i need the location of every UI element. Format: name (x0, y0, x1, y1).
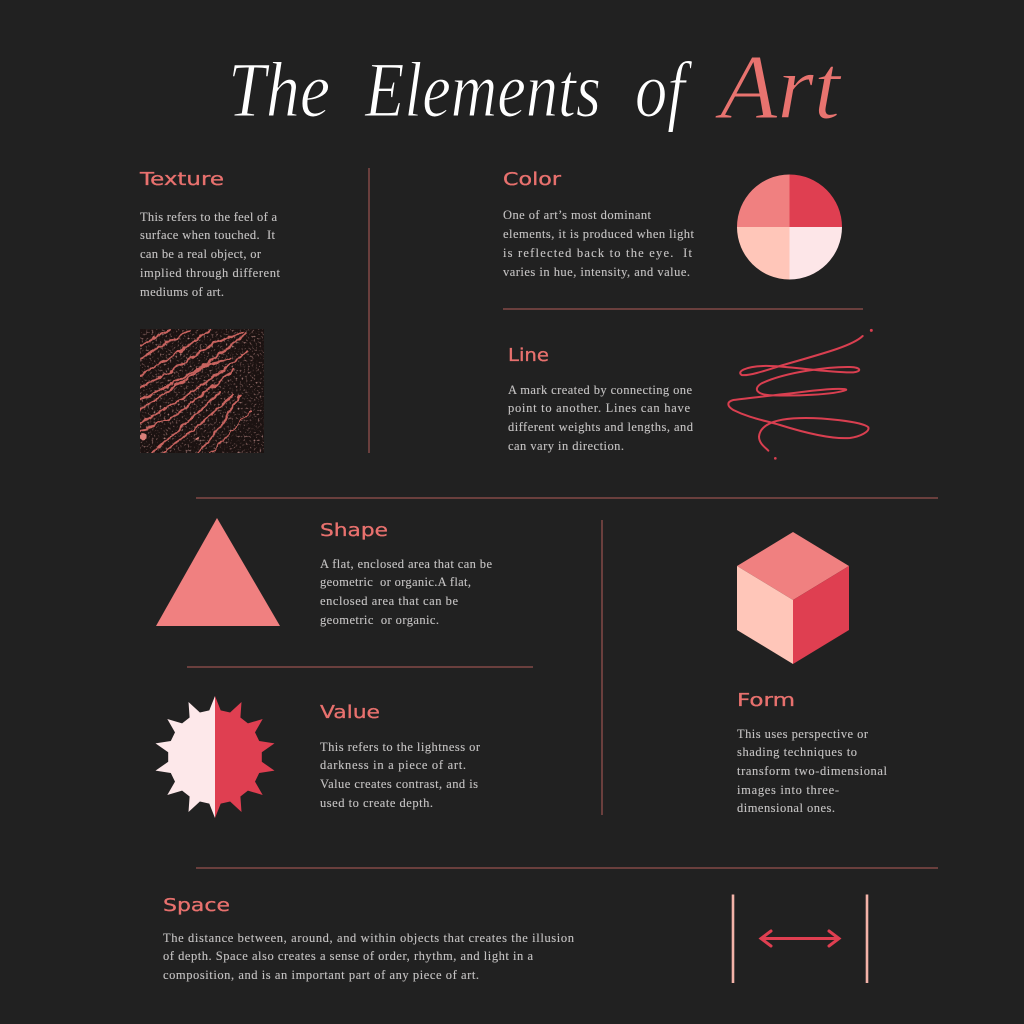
text block: line description: different weights and lengths, and (508, 420, 694, 434)
panel: texture (139, 170, 281, 453)
heading: value: Value (320, 703, 380, 723)
text block: shape description: geometric or organic.A flat, (320, 575, 471, 589)
text block: form description: dimensional ones. (737, 801, 835, 815)
title: The (228, 46, 330, 133)
title: Elements (364, 46, 601, 133)
text block: texture description: This refers to the feel of a (140, 210, 277, 224)
text block: value description: used to create depth. (320, 796, 433, 810)
heading: line: Line (508, 346, 549, 366)
panel: line (508, 329, 873, 460)
text block: color description: varies in hue, intensity, and value. (503, 265, 690, 279)
text block: shape description: geometric or organic. (320, 613, 439, 627)
text block: line description: point to another. Lines can have (508, 401, 690, 415)
text block: texture description: mediums of art. (140, 285, 224, 299)
text block: space description: of depth. Space also creates a sense of order, rhythm, and light in a (163, 949, 533, 963)
icon: squiggle line (728, 329, 873, 460)
text block: texture description (140, 210, 281, 299)
text block: color description (503, 208, 695, 279)
text block: color description: elements, it is produced when light (503, 227, 695, 241)
text block: form description: images into three- (737, 783, 839, 797)
text block: value description: Value creates contrast, and is (320, 777, 478, 791)
text block: line description (508, 383, 694, 453)
text block: line description: A mark created by connecting one (508, 383, 692, 397)
icon: triangle (156, 518, 280, 626)
text block: value description: darkness in a piece of art. (320, 758, 466, 772)
heading: form: Form (737, 691, 795, 711)
text block: line description: can vary in direction. (508, 439, 624, 453)
text block: space description: The distance between, around, and within objects that creates the illusion (163, 931, 575, 945)
text block: shape description (320, 557, 492, 627)
heading: space: Space (163, 896, 230, 916)
title: of (635, 46, 693, 133)
title (228, 36, 842, 138)
text block: shape description: enclosed area that can be (320, 594, 458, 608)
text block: form description (737, 727, 888, 815)
text block: shape description: A flat, enclosed area that can be (320, 557, 492, 571)
text block: form description: shading techniques to (737, 745, 857, 759)
panel: shape (156, 518, 492, 627)
heading: color: Color (503, 170, 562, 190)
text block: space description: composition, and is an important part of any piece of art. (163, 968, 479, 982)
icon: color wheel (737, 174, 842, 280)
icon: space arrow between bars (733, 894, 867, 983)
panel: value (156, 696, 481, 818)
icon: cube (737, 532, 849, 664)
panel: space (163, 894, 867, 983)
text block: value description: This refers to the lightness or (320, 740, 481, 754)
icon: texture image (140, 329, 264, 453)
icon: half-shaded sunburst (156, 696, 274, 818)
text block: color description: One of art’s most dominant (503, 208, 652, 222)
title: Art (714, 36, 842, 138)
panel: form (737, 532, 888, 815)
text block: value description (320, 740, 481, 810)
panel: color (503, 170, 842, 280)
text block: texture description: implied through different (140, 266, 281, 280)
text block: form description: This uses perspective or (737, 727, 869, 741)
text block: texture description: surface when touched. It (140, 228, 276, 242)
heading: texture: Texture (139, 170, 224, 190)
heading: shape: Shape (320, 521, 388, 541)
text block: form description: transform two-dimensional (737, 764, 888, 778)
text block: color description: is reflected back to the eye. It (503, 246, 693, 260)
text block: texture description: can be a real object, or (140, 247, 262, 261)
text block: space description (163, 931, 575, 982)
